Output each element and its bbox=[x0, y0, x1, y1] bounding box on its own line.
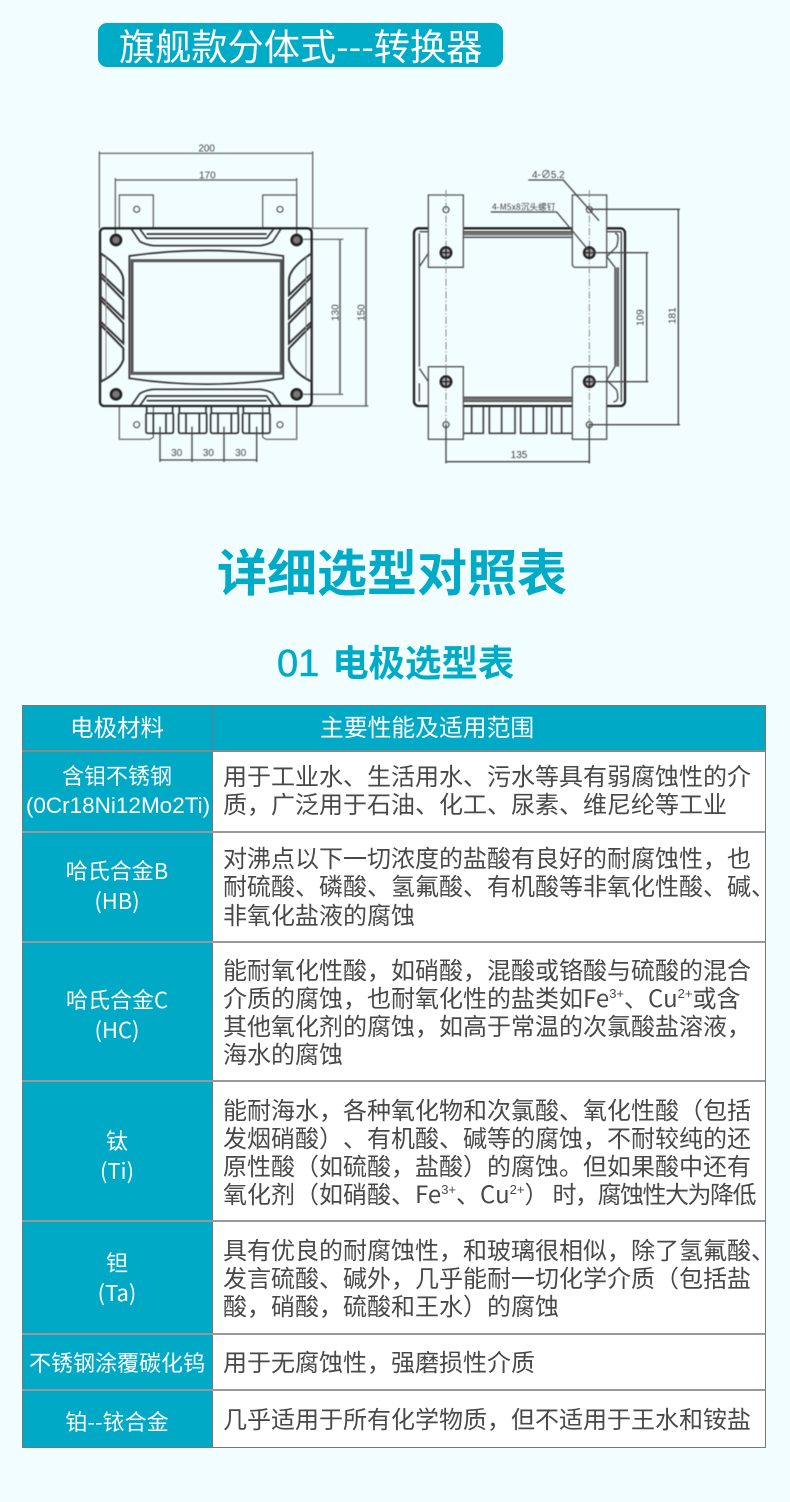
dimension labels bbox=[492, 170, 678, 461]
sub heading: 01 电极选型表 bbox=[277, 635, 514, 687]
bottom spacing dimension bbox=[160, 427, 257, 462]
row: molybdenum stainless steel: 质，广泛用于石油、化工、尿素、维尼纶等工业 bbox=[223, 785, 727, 820]
dimension labels: 150 bbox=[356, 304, 367, 321]
dimension drawings bbox=[98, 144, 681, 464]
cable glands bbox=[463, 406, 572, 433]
row: molybdenum stainless steel: 用于工业水、生活用水、污水等具有弱腐蚀性的介 bbox=[223, 757, 751, 792]
row: Hastelloy C: 哈氏合金C bbox=[66, 983, 168, 1015]
row: titanium: 钛 bbox=[106, 1124, 128, 1156]
row: Hastelloy B: 哈氏合金B bbox=[66, 854, 168, 886]
row: Hastelloy B: 对沸点以下一切浓度的盐酸有良好的耐腐蚀性，也 bbox=[223, 839, 751, 874]
row: tantalum: 具有优良的耐腐蚀性，和玻璃很相似，除了氢氟酸、 bbox=[223, 1231, 775, 1266]
row: molybdenum stainless steel bbox=[26, 757, 751, 820]
row: titanium bbox=[100, 1091, 756, 1210]
main heading: 详细选型对照表 bbox=[217, 534, 567, 606]
row: Hastelloy C: 能耐氧化性酸，如硝酸，混酸或铬酸与硫酸的混合 bbox=[223, 951, 751, 986]
dimension labels: 181 bbox=[667, 307, 678, 324]
row: titanium: 发烟硝酸）、有机酸、碱等的腐蚀，不耐较纯的还 bbox=[223, 1119, 751, 1154]
row: Hastelloy C: 其他氧化剂的腐蚀，如高于常温的次氯酸盐溶液， bbox=[223, 1007, 751, 1042]
dimension labels: 4-M5x8沉头螺钉 bbox=[492, 201, 556, 213]
row: tantalum: (Ta) bbox=[98, 1276, 136, 1308]
corner screws bbox=[111, 235, 302, 399]
row: Hastelloy B: (HB) bbox=[94, 884, 140, 916]
row: Hastelloy B: 耐硫酸、磷酸、氢氟酸、有机酸等非氧化性酸、碱、 bbox=[223, 867, 775, 902]
dimension labels: 170 bbox=[199, 170, 216, 181]
mounting screws bbox=[441, 247, 595, 387]
row: tungsten carbide coating bbox=[29, 1343, 535, 1378]
title banner: 旗舰款分体式---转换器 bbox=[119, 19, 482, 71]
drawing: rear view bbox=[414, 170, 680, 463]
row: tungsten carbide coating: 不锈钢涂覆碳化钨 bbox=[29, 1346, 205, 1378]
top and bottom handles bbox=[132, 229, 281, 405]
dimension labels: 130 bbox=[331, 304, 342, 321]
row: molybdenum stainless steel: 含钼不锈钢 bbox=[62, 759, 172, 791]
row: Hastelloy C: 介质的腐蚀，也耐氧化性的盐类如Fe3+、Cu2+或含 bbox=[223, 979, 740, 1014]
display screen bbox=[129, 250, 283, 384]
dimension labels: 200 bbox=[198, 144, 215, 155]
row: tungsten carbide coating: 用于无腐蚀性，强磨损性介质 bbox=[223, 1343, 535, 1378]
table left column fill bbox=[23, 706, 212, 1447]
row: titanium: (Ti) bbox=[100, 1154, 134, 1186]
row: titanium: 原性酸（如硫酸，盐酸）的腐蚀。但如果酸中还有 bbox=[223, 1147, 751, 1182]
dimension lines and leaders bbox=[446, 180, 680, 463]
row: Hastelloy B: 非氧化盐液的腐蚀 bbox=[223, 896, 415, 931]
row: tantalum: 酸，硝酸，硫酸和王水）的腐蚀 bbox=[223, 1287, 559, 1322]
dimension labels: 109 bbox=[635, 309, 646, 326]
dimension labels: 30 bbox=[235, 448, 247, 459]
row: tantalum: 钽 bbox=[106, 1246, 128, 1278]
dimension labels: 30 bbox=[203, 448, 214, 459]
mounting brackets bbox=[428, 195, 607, 439]
drawing: front view bbox=[99, 144, 368, 462]
row: tantalum: 发言硫酸、碱外，几乎能耐一切化学介质（包括盐 bbox=[223, 1259, 751, 1294]
row: Hastelloy B bbox=[66, 839, 775, 931]
row: Hastelloy C bbox=[66, 951, 751, 1070]
header: performance: 主要性能及适用范围 bbox=[320, 708, 534, 743]
row: platinum iridium alloy: 铂--铱合金 bbox=[65, 1405, 169, 1437]
row: platinum iridium alloy: 几乎适用于所有化学物质，但不适用于王水和铵盐 bbox=[223, 1400, 751, 1435]
row: titanium: 氧化剂（如硝酸、Fe3+、Cu2+）时，腐蚀性大为降低 bbox=[223, 1175, 755, 1210]
dimension labels bbox=[171, 144, 367, 459]
row: Hastelloy C: 海水的腐蚀 bbox=[223, 1035, 343, 1070]
row: Hastelloy C: (HC) bbox=[95, 1013, 139, 1045]
cable glands bbox=[146, 407, 270, 433]
side grips bbox=[101, 253, 312, 382]
dimension labels: 4-∅5.2 bbox=[532, 170, 565, 181]
center lines bbox=[446, 190, 589, 463]
table header bar bbox=[23, 706, 765, 751]
dimension labels: 135 bbox=[511, 450, 528, 461]
table frame bbox=[22, 705, 766, 1448]
row: tantalum bbox=[98, 1231, 775, 1322]
dimension labels: 30 bbox=[171, 448, 183, 459]
column divider bbox=[212, 705, 213, 1447]
header: material: 电极材料 bbox=[70, 709, 164, 743]
row: titanium: 能耐海水，各种氧化物和次氯酸、氧化性酸（包括 bbox=[223, 1091, 751, 1126]
row: molybdenum stainless steel: (0Cr18Ni12Mo2Ti) bbox=[26, 793, 210, 818]
